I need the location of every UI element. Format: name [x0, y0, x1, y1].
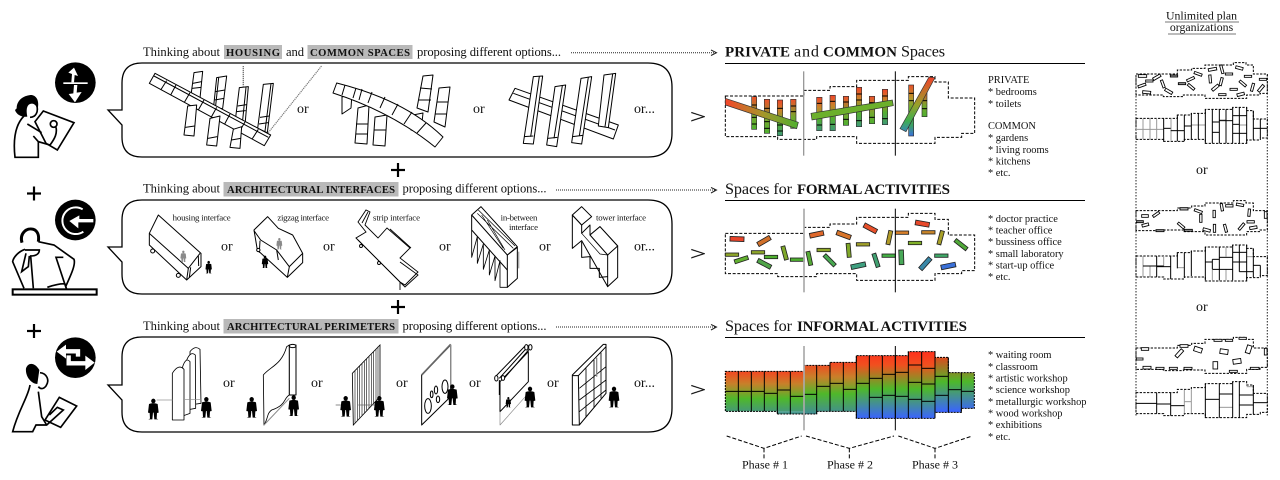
- sketch: stepped panels perimeter: [148, 348, 212, 420]
- list: private and common programs: * kitchens: [988, 156, 1030, 168]
- mini plan F: cell block: [1136, 382, 1267, 418]
- plus left row 3: [27, 324, 41, 338]
- list: formal programs: * teacher office: [988, 226, 1053, 237]
- list: informal programs: * exhibitions: [988, 420, 1042, 431]
- heading: spaces for formal activities: Spaces for: [725, 180, 793, 198]
- row 1 heading text: proposing different options...: [417, 45, 561, 59]
- dotted arrow row 3: [556, 324, 716, 330]
- or label: or: [547, 376, 559, 391]
- heading: spaces for informal activities: INFORMAL ACTIVITIES: [797, 319, 967, 335]
- heading: private and common spaces: and: [794, 43, 819, 61]
- or label: or...: [634, 102, 655, 117]
- mini plan B: cell block: [1136, 107, 1267, 143]
- phase braces and labels: [727, 436, 972, 472]
- row 1 heading text: COMMON SPACES: [310, 48, 410, 59]
- list: informal programs: [988, 350, 1087, 443]
- mini plan D: cell block: [1136, 245, 1267, 281]
- sketch: zigzag interface: [254, 213, 329, 277]
- icon: person writing, opposing arrows: [13, 337, 96, 432]
- sketch: in-between interface: interface: [509, 222, 538, 232]
- or label: or: [223, 376, 235, 391]
- heading: private and common spaces: PRIVATE: [725, 45, 790, 61]
- sketch: strip interface: [356, 210, 420, 290]
- icon: person thinking at desk, circular arrow left: [13, 200, 97, 295]
- mini plan A: rooms scattered: [1136, 63, 1267, 98]
- list: private and common programs: COMMON: [988, 121, 1036, 132]
- speech bubble 3: [108, 337, 672, 432]
- or label: or: [221, 240, 233, 255]
- list: formal programs: [988, 214, 1064, 283]
- or label: or: [1196, 163, 1208, 178]
- or label: or...: [634, 240, 655, 255]
- sketch: tower interface: [572, 207, 646, 287]
- sketch: roller screen perimeter: [495, 345, 535, 425]
- or label: or: [439, 240, 451, 255]
- heading: spaces for formal activities: [725, 180, 1085, 200]
- heading: unlimited plan organizations: Unlimited plan: [1166, 8, 1237, 22]
- list: informal programs: * wood workshop: [988, 408, 1062, 420]
- sketch: shelf grid perimeter: [572, 344, 619, 425]
- or label: or: [297, 102, 309, 117]
- list: formal programs: * etc.: [988, 272, 1011, 283]
- list: informal programs: * metallurgic workshop: [988, 397, 1087, 408]
- heading: private and common spaces: COMMON: [823, 45, 897, 61]
- arrow greater than row 2: >: [690, 244, 706, 265]
- row 2 heading text: Thinking about: [143, 182, 220, 196]
- heading: unlimited plan organizations: organizations: [1170, 20, 1234, 34]
- arrow greater than row 3: >: [690, 380, 706, 401]
- heading: unlimited plan organizations: [1165, 8, 1239, 34]
- arrow greater than row 1: >: [690, 107, 706, 128]
- mini plan E: few rooms: [1136, 337, 1267, 373]
- sketch: tower interface: tower interface: [596, 213, 646, 223]
- row 2 heading text: ARCHITECTURAL INTERFACES: [227, 185, 395, 196]
- row 3 heading text: Thinking about: [143, 319, 220, 333]
- list: informal programs: * artistic workshop: [988, 374, 1068, 384]
- phase braces and labels: Phase # 2: [827, 458, 873, 472]
- speech bubble 1: [108, 63, 672, 157]
- sketch row 1 option 1: straight bar with housing blocks: [149, 71, 273, 148]
- or label: or: [539, 240, 551, 255]
- list: informal programs: * waiting room: [988, 350, 1052, 361]
- sketch: housing interface: [149, 213, 231, 280]
- list: formal programs: * start-up office: [988, 260, 1055, 272]
- dotted callout lines: [243, 66, 322, 133]
- list: private and common programs: PRIVATE: [988, 75, 1029, 86]
- row 1 heading text: Thinking about: [143, 45, 220, 59]
- list: informal programs: * classroom: [988, 362, 1038, 373]
- list: formal programs: * small laboratory: [988, 249, 1064, 260]
- sketch: curtain perimeter: [246, 344, 299, 425]
- gradient block plan: informal activities: [725, 346, 974, 430]
- heading: spaces for informal activities: [725, 317, 1085, 338]
- sketch row 1 option 3: bars crossing: [509, 73, 618, 147]
- heading: private and common spaces: Spaces: [901, 43, 945, 61]
- sketch: strip interface: strip interface: [373, 213, 420, 223]
- or label: or: [473, 102, 485, 117]
- phase braces and labels: Phase # 1: [742, 458, 788, 472]
- list: private and common programs: * gardens: [988, 133, 1028, 144]
- list: private and common programs: * etc.: [988, 168, 1011, 179]
- or label: or: [396, 376, 408, 391]
- sketch: zigzag interface: zigzag interface: [277, 213, 329, 223]
- list: private and common programs: * bedrooms: [988, 87, 1037, 98]
- list: informal programs: * etc.: [988, 432, 1011, 443]
- sketch: in-between interface: [472, 207, 538, 287]
- row 2 heading text: proposing different options...: [402, 182, 546, 196]
- row 1 heading text: HOUSING: [226, 48, 280, 59]
- sketch: in-between interface: in-between: [501, 213, 538, 223]
- list: private and common programs: * living rooms: [988, 145, 1049, 156]
- dotted frame of plan column: [1136, 75, 1267, 416]
- row 1 heading text: [143, 45, 561, 59]
- plus between row 2 and 3: [391, 300, 405, 314]
- sketch: housing interface: housing interface: [173, 213, 231, 223]
- plan: formal activity rooms: [725, 209, 975, 292]
- or label: or: [311, 376, 323, 391]
- or label: or: [1196, 300, 1208, 315]
- dotted arrow row 2: [556, 188, 716, 193]
- or label: or: [469, 376, 481, 391]
- list: formal programs: * doctor practice: [988, 214, 1058, 225]
- sketch: vertical slats perimeter: [336, 345, 385, 425]
- phase braces and labels: Phase # 3: [912, 458, 958, 472]
- row 2 heading text: [143, 182, 546, 196]
- speech bubble 2: [108, 200, 672, 294]
- list: formal programs: * bussiness office: [988, 237, 1062, 248]
- list: private and common programs: [988, 75, 1049, 179]
- row 3 heading text: ARCHITECTURAL PERIMETERS: [227, 322, 395, 333]
- plus left row 2: [27, 186, 41, 200]
- heading: spaces for informal activities: Spaces for: [725, 317, 793, 335]
- dotted arrow row 1: [571, 50, 716, 56]
- plan: private and common spaces: [725, 71, 975, 156]
- row 3 heading text: [143, 319, 546, 334]
- mini plan C: rooms scattered: [1136, 201, 1267, 235]
- or label: or...: [634, 376, 655, 391]
- list: informal programs: * science workshop: [988, 385, 1070, 396]
- row 3 heading text: proposing different options...: [402, 319, 546, 333]
- plus between row 1 and 2: [391, 163, 405, 177]
- row 1 heading text: and: [286, 45, 305, 59]
- sketch: perforated wall perimeter: [422, 344, 458, 425]
- sketch row 1 option 2: curved bar with housing blocks: [333, 75, 450, 147]
- list: private and common programs: * toilets: [988, 99, 1021, 110]
- heading: private and common spaces: [725, 43, 1085, 64]
- heading: spaces for formal activities: FORMAL ACTIVITIES: [797, 182, 950, 198]
- icon: person drawing, circular arrows up down: [14, 62, 96, 157]
- or label: or: [323, 240, 335, 255]
